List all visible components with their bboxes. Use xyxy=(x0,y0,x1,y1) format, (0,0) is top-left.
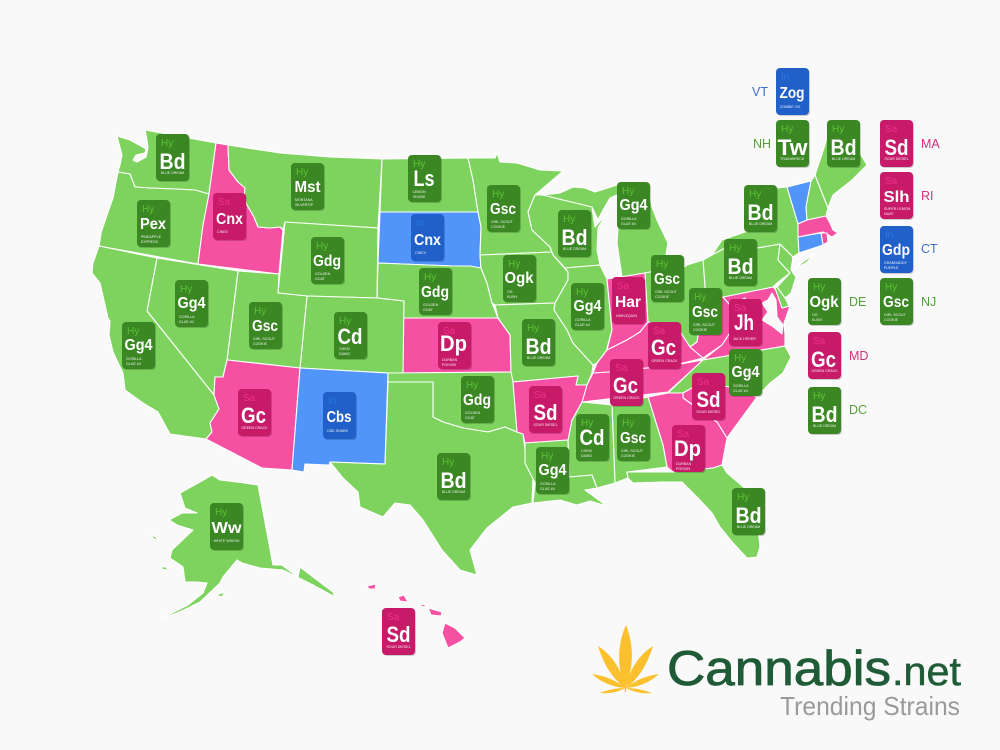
card: West Virginia Girl Scout Cookie: GIRL SCOUT xyxy=(693,323,716,327)
card: West Virginia Girl Scout Cookie xyxy=(689,288,723,336)
state: Minnesota xyxy=(468,153,563,255)
card: West Virginia Girl Scout Cookie: COOKIE xyxy=(693,328,708,332)
card: Michigan Gorilla Glue 4: GLUE #4 xyxy=(621,222,636,226)
card: District of Columbia Blue Dream: Hy xyxy=(813,391,825,402)
card: Illinois Gorilla Glue 4 xyxy=(571,283,605,331)
card: Delaware OG Kush: OG xyxy=(812,313,818,317)
state: New Hampshire xyxy=(806,175,828,220)
card: Connecticut Granddaddy Purple: In xyxy=(885,230,893,241)
card: Oklahoma Golden Goat: GOAT xyxy=(465,416,476,420)
card: South Dakota Cinex: In xyxy=(416,218,424,229)
card: North Dakota Lemon Skunk: SKUNK xyxy=(413,195,426,199)
state label: NH: NH xyxy=(753,137,771,151)
state label: DC: DC xyxy=(849,403,867,417)
state label: RI: RI xyxy=(921,189,934,203)
card: Texas Blue Dream: BLUE DREAM xyxy=(442,490,465,494)
card: Washington Blue Dream: Bd xyxy=(160,149,186,174)
card: Massachusetts Sour Diesel: SOUR DIESEL xyxy=(884,157,909,161)
card: North Carolina Gorilla Glue 4 xyxy=(729,349,763,397)
card: Rhode Island Super Lemon Haze: Slh xyxy=(884,189,910,206)
card: Maryland Green Crack: GREEN CRACK xyxy=(811,369,838,373)
card: Rhode Island Super Lemon Haze xyxy=(880,172,914,220)
state: Wisconsin xyxy=(528,195,607,268)
card: Nevada Gorilla Glue 4: Gg4 xyxy=(178,295,206,312)
state: Mississippi xyxy=(568,402,615,488)
card: South Carolina Sour Diesel: Sa xyxy=(697,377,710,388)
card: Nevada Gorilla Glue 4: GORILLA xyxy=(179,315,195,319)
card: Montana Silvertip: MONTANA xyxy=(295,198,313,202)
state: Georgia xyxy=(648,393,727,472)
card: Nebraska Golden Goat xyxy=(419,268,453,316)
card: Kansas Durban Poison: Sa xyxy=(443,326,456,337)
bay: Chesapeake xyxy=(762,293,783,334)
state label: VT: VT xyxy=(752,85,768,99)
card: Florida Blue Dream: BLUE DREAM xyxy=(737,525,760,529)
card: Idaho Cinex: CINEX xyxy=(217,230,229,234)
card: Vermont Zombie OG: ZOMBIE OG xyxy=(780,105,801,109)
card: South Carolina Sour Diesel: Sd xyxy=(696,387,720,412)
card: Colorado Chem Dawg: DAWG xyxy=(339,352,350,356)
card: North Carolina Gorilla Glue 4: GLUE #4 xyxy=(733,389,748,393)
card: Ohio Girl Scout Cookie: GIRL SCOUT xyxy=(655,290,678,294)
state: Arkansas xyxy=(513,376,587,443)
card: Tennessee Green Crack xyxy=(610,359,644,407)
card: Rhode Island Super Lemon Haze: SUPER LEMON xyxy=(884,207,911,211)
card: Minnesota Girl Scout Cookie: Gsc xyxy=(490,201,516,218)
card: District of Columbia Blue Dream: Bd xyxy=(812,402,838,427)
card: Alabama Girl Scout Cookie: Hy xyxy=(622,418,634,429)
card: Illinois Gorilla Glue 4: Gg4 xyxy=(574,298,602,315)
card: New Mexico CBD Shark: CBD SHARK xyxy=(327,429,349,433)
card: North Dakota Lemon Skunk xyxy=(408,155,442,203)
card: West Virginia Girl Scout Cookie: Gsc xyxy=(692,304,718,321)
card: Louisiana Gorilla Glue 4 xyxy=(536,447,570,495)
card: Kentucky Green Crack xyxy=(648,322,682,370)
card: Montana Silvertip xyxy=(291,163,325,211)
card: Kansas Durban Poison: DURBAN xyxy=(442,358,458,362)
card: Alaska White Widow: Hy xyxy=(215,507,227,518)
state: Iowa xyxy=(480,252,568,305)
card: Connecticut Granddaddy Purple: GRANDADDY xyxy=(884,261,908,265)
card: Arizona Green Crack xyxy=(238,389,272,437)
card: Illinois Gorilla Glue 4: GLUE #4 xyxy=(575,323,590,327)
card: Washington Blue Dream: Hy xyxy=(161,138,173,149)
card: Missouri Blue Dream xyxy=(522,319,556,367)
card: Arkansas Sour Diesel xyxy=(529,386,563,434)
card: North Carolina Gorilla Glue 4: GORILLA xyxy=(733,384,749,388)
card: Missouri Blue Dream: BLUE DREAM xyxy=(527,356,550,360)
card: Minnesota Girl Scout Cookie: Hy xyxy=(492,189,504,200)
state: Rhode Island xyxy=(821,233,828,245)
card: Nevada Gorilla Glue 4 xyxy=(175,280,209,328)
card: Alabama Girl Scout Cookie: COOKIE xyxy=(621,454,636,458)
card: Arizona Green Crack: Gc xyxy=(241,403,266,428)
state: Indiana xyxy=(607,273,648,350)
state: Florida xyxy=(627,465,760,558)
card: Minnesota Girl Scout Cookie: COOKIE xyxy=(491,225,506,229)
card: Kansas Durban Poison: POISON xyxy=(442,363,456,367)
card: Oregon Pineapple Express: Pex xyxy=(140,216,166,233)
card: Wisconsin Blue Dream: BLUE DREAM xyxy=(563,247,586,251)
card: Montana Silvertip: SILVERTIP xyxy=(295,203,314,207)
card: New Hampshire Trainwreck: Tw xyxy=(778,135,808,160)
logo tagline: Trending Strains xyxy=(780,691,960,721)
card: Mississippi Chem Dawg: Cd xyxy=(580,425,604,450)
card: West Virginia Girl Scout Cookie: Hy xyxy=(694,292,706,303)
card: Massachusetts Sour Diesel: Sd xyxy=(884,135,908,160)
card: Indiana Harlequin: Sa xyxy=(617,281,630,292)
state: North Carolina xyxy=(668,346,791,397)
card: Utah Girl Scout Cookie: COOKIE xyxy=(253,342,268,346)
card: Texas Blue Dream xyxy=(437,453,471,501)
state: Oklahoma xyxy=(388,372,517,432)
card: Maine Blue Dream: BLUE DREAM xyxy=(832,157,855,161)
card: Ohio Girl Scout Cookie: Hy xyxy=(656,259,668,270)
card: Ohio Girl Scout Cookie: COOKIE xyxy=(655,295,670,299)
state: Michigan lower peninsula xyxy=(617,190,668,277)
card: Iowa OG Kush: OG xyxy=(507,290,513,294)
card: Michigan Gorilla Glue 4: Gg4 xyxy=(620,197,648,214)
card: Mississippi Chem Dawg: CHEM xyxy=(581,449,592,453)
state: Pennsylvania xyxy=(703,244,790,300)
card: Alaska White Widow: Ww xyxy=(212,520,242,537)
card: Michigan Gorilla Glue 4 xyxy=(617,182,651,230)
card: Wisconsin Blue Dream: Hy xyxy=(563,214,575,225)
card: California Gorilla Glue 4: Gg4 xyxy=(124,337,153,354)
card: Oregon Pineapple Express: PINEAPPLE xyxy=(141,235,162,239)
card: Nevada Gorilla Glue 4: Hy xyxy=(180,284,192,295)
logo wordmark: .net: .net xyxy=(892,650,961,694)
card: New Jersey Girl Scout Cookie xyxy=(880,278,914,326)
card: North Carolina Gorilla Glue 4: Gg4 xyxy=(732,364,760,381)
logo: Cannabis.net Trending Strains xyxy=(592,625,961,721)
card: Alabama Girl Scout Cookie xyxy=(617,414,651,462)
card: Tennessee Green Crack: Sa xyxy=(615,363,628,374)
card: Ohio Girl Scout Cookie: Gsc xyxy=(654,271,680,288)
card: Florida Blue Dream: Bd xyxy=(736,503,762,528)
card: Alabama Girl Scout Cookie: Gsc xyxy=(620,430,646,447)
card: Washington Blue Dream: BLUE DREAM xyxy=(161,171,184,175)
card: Delaware OG Kush: Hy xyxy=(813,282,825,293)
card: Montana Silvertip: Mst xyxy=(294,179,321,196)
card: Idaho Cinex: Sa xyxy=(218,197,231,208)
card: Georgia Durban Poison: POISON xyxy=(676,467,690,471)
state: Arizona xyxy=(206,360,300,470)
card: Mississippi Chem Dawg xyxy=(576,414,610,462)
card: Michigan Gorilla Glue 4: Hy xyxy=(622,186,634,197)
card: Tennessee Green Crack: GREEN CRACK xyxy=(613,396,640,400)
card: Colorado Chem Dawg: CHEM xyxy=(339,347,350,351)
card: District of Columbia Blue Dream xyxy=(808,387,842,435)
card: Nebraska Golden Goat: GOAT xyxy=(423,308,434,312)
state label: CT: CT xyxy=(921,242,938,256)
state: New York xyxy=(712,187,799,257)
state: Long Island xyxy=(795,253,815,268)
card: Oklahoma Golden Goat: GOLDEN xyxy=(465,411,481,415)
card: Minnesota Girl Scout Cookie xyxy=(487,185,521,233)
card: Alabama Girl Scout Cookie: GIRL SCOUT xyxy=(621,449,644,453)
card: Pennsylvania Blue Dream: BLUE DREAM xyxy=(729,276,752,280)
card: Oregon Pineapple Express xyxy=(137,200,171,248)
card: New Mexico CBD Shark: In xyxy=(328,396,336,407)
card: Virginia Jack Herer xyxy=(729,299,763,347)
card: Maryland Green Crack: Gc xyxy=(811,347,836,372)
card: Maine Blue Dream: Hy xyxy=(832,124,844,135)
card: New York Blue Dream: Bd xyxy=(748,200,774,225)
card: Nebraska Golden Goat: GOLDEN xyxy=(423,303,439,307)
card: North Carolina Gorilla Glue 4: Hy xyxy=(734,353,746,364)
card: North Dakota Lemon Skunk: Hy xyxy=(413,159,425,170)
card: Rhode Island Super Lemon Haze: HAZE xyxy=(884,212,894,216)
state: Nebraska xyxy=(377,263,498,318)
card: Wyoming Golden Goat: GOAT xyxy=(315,277,326,281)
card: Utah Girl Scout Cookie: Hy xyxy=(254,306,266,317)
card: Wyoming Golden Goat xyxy=(311,237,345,285)
card: California Gorilla Glue 4: GORILLA xyxy=(126,357,142,361)
card: Oklahoma Golden Goat: Gdg xyxy=(463,392,491,409)
state: Washington xyxy=(117,130,216,194)
card: Washington Blue Dream xyxy=(156,134,190,182)
card: Oklahoma Golden Goat: Hy xyxy=(466,380,478,391)
card: Michigan Gorilla Glue 4: GORILLA xyxy=(621,217,637,221)
card: Kentucky Green Crack: GREEN CRACK xyxy=(651,359,678,363)
card: Maine Blue Dream xyxy=(827,120,861,168)
card: Oregon Pineapple Express: EXPRESS xyxy=(141,240,159,244)
card: New York Blue Dream: BLUE DREAM xyxy=(749,222,772,226)
state: Massachusetts xyxy=(798,216,838,237)
state: West Virginia xyxy=(690,297,748,358)
card: Massachusetts Sour Diesel: Sa xyxy=(885,124,898,135)
card: District of Columbia Blue Dream: BLUE DREAM xyxy=(813,424,836,428)
card: Colorado Chem Dawg: Hy xyxy=(339,316,351,327)
card: Delaware OG Kush: Ogk xyxy=(810,294,839,311)
card: Kentucky Green Crack: Sa xyxy=(653,326,666,337)
card: Iowa OG Kush: Ogk xyxy=(504,270,534,287)
card: North Dakota Lemon Skunk: LEMON xyxy=(413,190,426,194)
card: Connecticut Granddaddy Purple xyxy=(880,226,914,274)
state: Nevada xyxy=(147,258,238,395)
card: Vermont Zombie OG: In xyxy=(781,72,789,83)
card: Rhode Island Super Lemon Haze: Sa xyxy=(885,176,898,187)
card: Wisconsin Blue Dream xyxy=(558,210,592,258)
state: Wyoming xyxy=(278,222,378,298)
card: Minnesota Girl Scout Cookie: GIRL SCOUT xyxy=(491,220,514,224)
card: New Hampshire Trainwreck xyxy=(776,120,810,168)
state label: MA: MA xyxy=(921,137,940,151)
card: Kansas Durban Poison xyxy=(438,322,472,370)
card: Wyoming Golden Goat: Hy xyxy=(316,241,328,252)
card: North Dakota Lemon Skunk: Ls xyxy=(414,166,434,191)
card: Georgia Durban Poison: Sa xyxy=(677,429,690,440)
state: California xyxy=(92,246,219,439)
card: Montana Silvertip: Hy xyxy=(296,167,308,178)
card: South Dakota Cinex xyxy=(411,214,445,262)
card: Utah Girl Scout Cookie: Gsc xyxy=(252,318,278,335)
card: Oregon Pineapple Express: Hy xyxy=(142,204,154,215)
card: New York Blue Dream xyxy=(744,185,778,233)
state: Hawaii xyxy=(367,584,465,648)
card: Vermont Zombie OG xyxy=(776,68,810,116)
logo wordmark: Cannabis: Cannabis xyxy=(667,642,891,696)
card: Georgia Durban Poison: Dp xyxy=(674,436,701,461)
card: South Dakota Cinex: Cnx xyxy=(414,232,441,249)
card: Pennsylvania Blue Dream: Hy xyxy=(729,243,741,254)
state: Colorado xyxy=(300,296,404,373)
card: South Dakota Cinex: CINEX xyxy=(415,251,427,255)
card: Hawaii Sour Diesel: Sa xyxy=(387,612,400,623)
card: Arkansas Sour Diesel: Sa xyxy=(534,390,547,401)
card: Texas Blue Dream: Hy xyxy=(442,457,454,468)
state: Alaska islands xyxy=(151,535,225,597)
card: California Gorilla Glue 4: GLUE #4 xyxy=(126,362,141,366)
card: Arizona Green Crack: Sa xyxy=(243,393,256,404)
state: Alabama xyxy=(612,397,667,483)
card: Missouri Blue Dream: Bd xyxy=(526,334,552,359)
icon: cannabis leaf xyxy=(592,625,659,693)
card: Delaware OG Kush: KUSH xyxy=(812,318,822,322)
card: New Jersey Girl Scout Cookie: Gsc xyxy=(883,294,909,311)
state: Ohio xyxy=(645,260,705,347)
card: Hawaii Sour Diesel: Sd xyxy=(386,622,410,647)
state: Montana xyxy=(228,145,382,230)
card: Vermont Zombie OG: Zog xyxy=(780,85,804,102)
card: Delaware OG Kush xyxy=(808,278,842,326)
card: California Gorilla Glue 4: Hy xyxy=(127,326,139,337)
state: Alaska xyxy=(163,475,335,618)
map of the United States xyxy=(92,122,867,648)
card: Iowa OG Kush: Hy xyxy=(508,259,520,270)
card: Pennsylvania Blue Dream xyxy=(724,239,758,287)
card: Tennessee Green Crack: Gc xyxy=(613,373,638,398)
card: Ohio Girl Scout Cookie xyxy=(651,255,685,303)
card: California Gorilla Glue 4 xyxy=(122,322,156,370)
state: Maine xyxy=(815,122,867,208)
state: South Carolina xyxy=(683,385,757,438)
card: New Jersey Girl Scout Cookie: GIRL SCOUT xyxy=(884,313,907,317)
card: Arizona Green Crack: GREEN CRACK xyxy=(241,426,268,430)
card: Connecticut Granddaddy Purple: PURPLE xyxy=(884,266,899,270)
card: Iowa OG Kush xyxy=(503,255,537,303)
card: Illinois Gorilla Glue 4: Hy xyxy=(576,287,588,298)
card: Nebraska Golden Goat: Hy xyxy=(424,272,436,283)
card: Maryland Green Crack: Sa xyxy=(813,336,826,347)
card: Arkansas Sour Diesel: SOUR DIESEL xyxy=(533,423,558,427)
card: Georgia Durban Poison: DURBAN xyxy=(676,462,692,466)
card: Utah Girl Scout Cookie: GIRL SCOUT xyxy=(253,337,276,341)
card: Maryland Green Crack xyxy=(808,332,842,380)
card: Virginia Jack Herer: JACK HERER xyxy=(733,337,756,341)
card: Nebraska Golden Goat: Gdg xyxy=(421,284,449,301)
state: Michigan upper peninsula xyxy=(543,185,625,220)
card: Mississippi Chem Dawg: Hy xyxy=(581,418,593,429)
state: Delaware xyxy=(775,286,789,308)
card: New York Blue Dream: Hy xyxy=(749,189,761,200)
card: Pennsylvania Blue Dream: Bd xyxy=(728,254,754,279)
state: North Dakota xyxy=(380,158,478,212)
state: Oregon xyxy=(99,172,209,264)
card: Colorado Chem Dawg: Cd xyxy=(338,324,362,349)
card: Missouri Blue Dream: Hy xyxy=(527,323,539,334)
state: Vermont xyxy=(787,181,811,224)
card: Connecticut Granddaddy Purple: Gdp xyxy=(882,242,910,259)
state: Connecticut xyxy=(798,233,823,253)
card: South Carolina Sour Diesel xyxy=(692,373,726,421)
card: Florida Blue Dream: Hy xyxy=(737,492,749,503)
state label: MD: MD xyxy=(849,349,868,363)
state label: NJ: NJ xyxy=(921,295,936,309)
card: Indiana Harlequin: Har xyxy=(615,294,641,311)
card: New Mexico CBD Shark: Cbs xyxy=(326,409,352,426)
card: Alaska White Widow xyxy=(210,503,244,551)
state: Tennessee xyxy=(582,360,703,402)
state: Missouri xyxy=(495,303,593,385)
card: Virginia Jack Herer: Sa xyxy=(734,303,747,314)
card: Louisiana Gorilla Glue 4: Gg4 xyxy=(538,462,567,479)
card: New Hampshire Trainwreck: Hy xyxy=(781,124,793,135)
card: Arkansas Sour Diesel: Sd xyxy=(534,400,558,425)
card: New Jersey Girl Scout Cookie: Hy xyxy=(885,282,897,293)
state: Texas xyxy=(330,382,533,575)
card: Mississippi Chem Dawg: DAWG xyxy=(581,454,592,458)
state: Virginia and Maryland xyxy=(703,287,790,360)
card: Florida Blue Dream xyxy=(732,488,766,536)
card: Iowa OG Kush: KUSH xyxy=(507,295,517,299)
state: New Jersey xyxy=(777,244,796,298)
state: Idaho xyxy=(198,143,283,274)
card: Kansas Durban Poison: Dp xyxy=(440,331,467,356)
card: Wyoming Golden Goat: GOLDEN xyxy=(315,272,331,276)
card: Louisiana Gorilla Glue 4: Hy xyxy=(541,451,553,462)
card: Illinois Gorilla Glue 4: GORILLA xyxy=(575,318,591,322)
card: South Carolina Sour Diesel: SOUR DIESEL xyxy=(696,410,721,414)
card: Idaho Cinex: Cnx xyxy=(216,211,243,228)
card: Wisconsin Blue Dream: Bd xyxy=(562,225,588,250)
card: Virginia Jack Herer: Jh xyxy=(734,310,754,335)
card: New Hampshire Trainwreck: TRAINWRECK xyxy=(780,157,805,161)
card: Idaho Cinex xyxy=(213,193,247,241)
state: Utah xyxy=(227,271,307,368)
card: Wyoming Golden Goat: Gdg xyxy=(313,253,341,270)
card: Indiana Harlequin xyxy=(612,277,646,325)
state: Illinois xyxy=(554,265,612,365)
state: Louisiana xyxy=(525,440,607,506)
state: South Dakota xyxy=(378,212,481,268)
state label: DE: DE xyxy=(849,295,866,309)
card: New Jersey Girl Scout Cookie: COOKIE xyxy=(884,318,899,322)
card: Utah Girl Scout Cookie xyxy=(249,302,283,350)
state: New Mexico xyxy=(292,368,388,472)
card: Texas Blue Dream: Bd xyxy=(440,468,466,493)
card: Georgia Durban Poison xyxy=(672,425,706,473)
card: Indiana Harlequin: HARLEQUIN xyxy=(616,314,637,318)
card: Massachusetts Sour Diesel xyxy=(880,120,914,168)
card: Nevada Gorilla Glue 4: GLUE #4 xyxy=(179,320,194,324)
state: Kentucky xyxy=(593,322,703,373)
card: Kentucky Green Crack: Gc xyxy=(651,335,676,360)
card: Louisiana Gorilla Glue 4: GORILLA xyxy=(540,482,556,486)
card: New Mexico CBD Shark xyxy=(323,392,357,440)
card: Alaska White Widow: WHITE WIDOW xyxy=(214,539,240,543)
card: Louisiana Gorilla Glue 4: GLUE #4 xyxy=(540,487,555,491)
card: Maine Blue Dream: Bd xyxy=(830,135,856,160)
card: Colorado Chem Dawg xyxy=(334,312,368,360)
card: Oklahoma Golden Goat xyxy=(461,376,495,424)
card: Hawaii Sour Diesel: SOUR DIESEL xyxy=(386,645,411,649)
state: Kansas xyxy=(403,318,511,373)
card: Hawaii Sour Diesel xyxy=(382,608,416,656)
